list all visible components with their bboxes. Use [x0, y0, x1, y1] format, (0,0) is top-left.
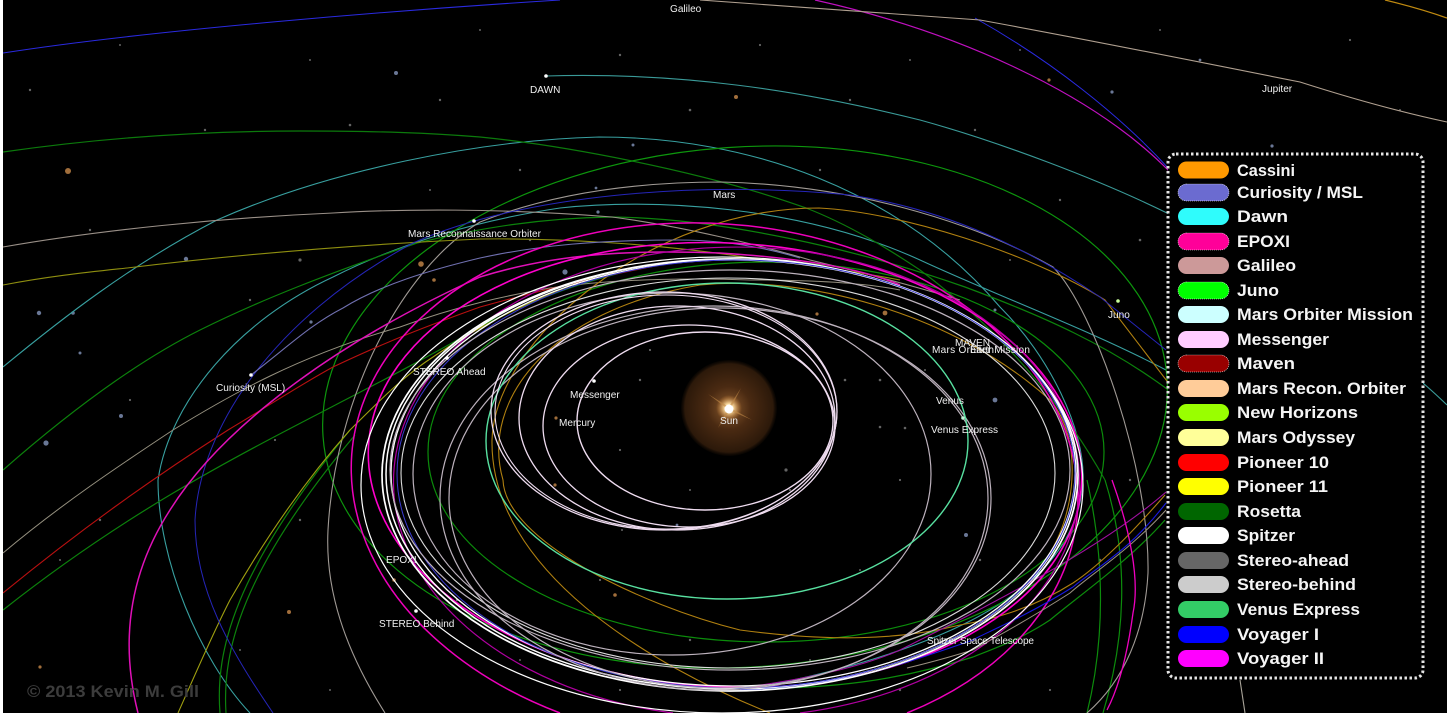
EPOXI magenta ellipse 1 [351, 223, 1078, 713]
tan lower-left line [3, 279, 900, 553]
Rosetta top line [3, 131, 1105, 480]
EPOXI magenta ellipse 2 [357, 225, 1093, 705]
Galileo [1178, 256, 1296, 275]
Galileo: Galileo [1237, 256, 1296, 275]
Pioneer 11 yellow [178, 275, 600, 713]
Sun [681, 360, 777, 456]
Rosetta: Rosetta [1237, 502, 1302, 521]
Cassini [1178, 161, 1295, 180]
object labels: Mars Reconnaissance Orbiter [408, 229, 542, 240]
Dawn [1178, 207, 1288, 226]
object labels: STEREO Behind [379, 619, 454, 630]
EPOXI [1178, 232, 1290, 251]
object labels: Venus Express [931, 425, 998, 436]
Stereo-ahead: Stereo-ahead [1237, 551, 1349, 570]
Juno: Juno [1237, 281, 1279, 300]
object labels: Spitzer Space Telescope [927, 636, 1034, 647]
Rosetta ellipse [322, 145, 1168, 669]
Pioneer 11: Pioneer 11 [1237, 477, 1328, 496]
grey line from left [3, 210, 960, 300]
object labels: Mercury [559, 418, 595, 429]
object labels: STEREO Ahead [413, 367, 486, 378]
Mars Reconnaissance Orbiter loop (teal) [158, 204, 1166, 713]
object labels: Mars [713, 190, 735, 201]
object labels: Curiosity (MSL) [216, 383, 285, 394]
Rosetta right arcs [740, 480, 1165, 713]
Mars Odyssey: Mars Odyssey [1237, 428, 1356, 447]
Messenger: Messenger [1237, 330, 1329, 349]
Rosetta inner ellipse [428, 262, 1104, 642]
Mars Odyssey olive line [3, 239, 900, 285]
Mars transfer orbits (pale grey) [390, 270, 1070, 690]
Maven: Maven [1237, 354, 1295, 373]
Curiosity blue [195, 189, 1166, 713]
object labels: Messenger [570, 390, 620, 401]
Pioneer 10 [1178, 453, 1329, 472]
EPOXI: EPOXI [1237, 232, 1290, 251]
Mars Odyssey [1178, 428, 1356, 447]
New Horizons [1178, 403, 1358, 422]
Pioneer 10: Pioneer 10 [1237, 453, 1329, 472]
Stereo-behind: Stereo-behind [1237, 575, 1356, 594]
Curiosity / MSL [1178, 183, 1363, 202]
object labels: DAWN [530, 85, 560, 96]
Voyager I [1178, 625, 1319, 644]
Venus Express: Venus Express [1237, 600, 1360, 619]
Messenger [1178, 330, 1329, 349]
object labels: Galileo [670, 4, 702, 15]
Curiosity / MSL: Curiosity / MSL [1237, 183, 1363, 202]
Galileo to Jupiter line (tan) [700, 0, 1447, 122]
Mars Orbiter Mission: Mars Orbiter Mission [1237, 305, 1413, 324]
object labels [216, 4, 1293, 647]
New Horizons: New Horizons [1237, 403, 1358, 422]
Curiosity transfer grey-blue [251, 240, 800, 375]
EPOXI big magenta loop [129, 252, 900, 713]
Messenger orbits (pale pink) [491, 292, 837, 530]
Voyager I trajectory (blue) [3, 0, 1170, 170]
Earth orbit bundle (white) [361, 257, 1083, 713]
Sun: Sun [720, 416, 738, 427]
object labels: Earth [970, 345, 994, 356]
spacecraft markers [249, 74, 1120, 613]
Rosetta left arcs [3, 217, 1175, 713]
legend panel [1168, 154, 1423, 678]
object labels: Juno [1108, 310, 1130, 321]
object labels: EPOXI [386, 555, 417, 566]
Cassini: Cassini [1237, 161, 1295, 180]
object labels: Venus [936, 396, 964, 407]
Spitzer [1178, 526, 1295, 545]
Mars orbit [328, 182, 1148, 713]
Juno [1178, 281, 1279, 300]
Maven [1178, 354, 1295, 373]
grey far-right [1240, 680, 1245, 713]
object labels: Jupiter [1262, 84, 1293, 95]
object labels: Mars Orbiter Mission [932, 345, 1030, 356]
Spitzer: Spitzer [1237, 526, 1295, 545]
Voyager lower right bundle [740, 492, 1166, 688]
Venus Express [1178, 600, 1360, 619]
copyright: © 2013 Kevin M. Gill [27, 682, 199, 701]
Voyager II: Voyager II [1237, 649, 1324, 668]
Cassini inner gold [499, 283, 1165, 638]
Mars Recon. Orbiter: Mars Recon. Orbiter [1237, 379, 1406, 398]
Cassini outer gold [492, 208, 1170, 713]
Dawn: Dawn [1237, 207, 1288, 226]
Pioneer 11 [1178, 477, 1328, 496]
Voyager I: Voyager I [1237, 625, 1319, 644]
Cassini top right line [1385, 0, 1447, 18]
object labels: MAVEN [955, 338, 990, 349]
Pioneer 10 / Maven red [3, 265, 660, 593]
Stereo-ahead [1178, 551, 1349, 570]
Rosetta [1178, 502, 1302, 521]
Dawn outer loop [3, 137, 1083, 690]
Dawn arc [546, 75, 1447, 405]
bright magenta right arcs [1107, 480, 1135, 710]
Voyager II [1178, 649, 1324, 668]
Voyager II trajectory (magenta) [815, 0, 1170, 172]
Venus orbit (green) [486, 283, 968, 599]
Maven dark magenta ellipse [394, 247, 1080, 713]
Stereo-behind [1178, 575, 1356, 594]
